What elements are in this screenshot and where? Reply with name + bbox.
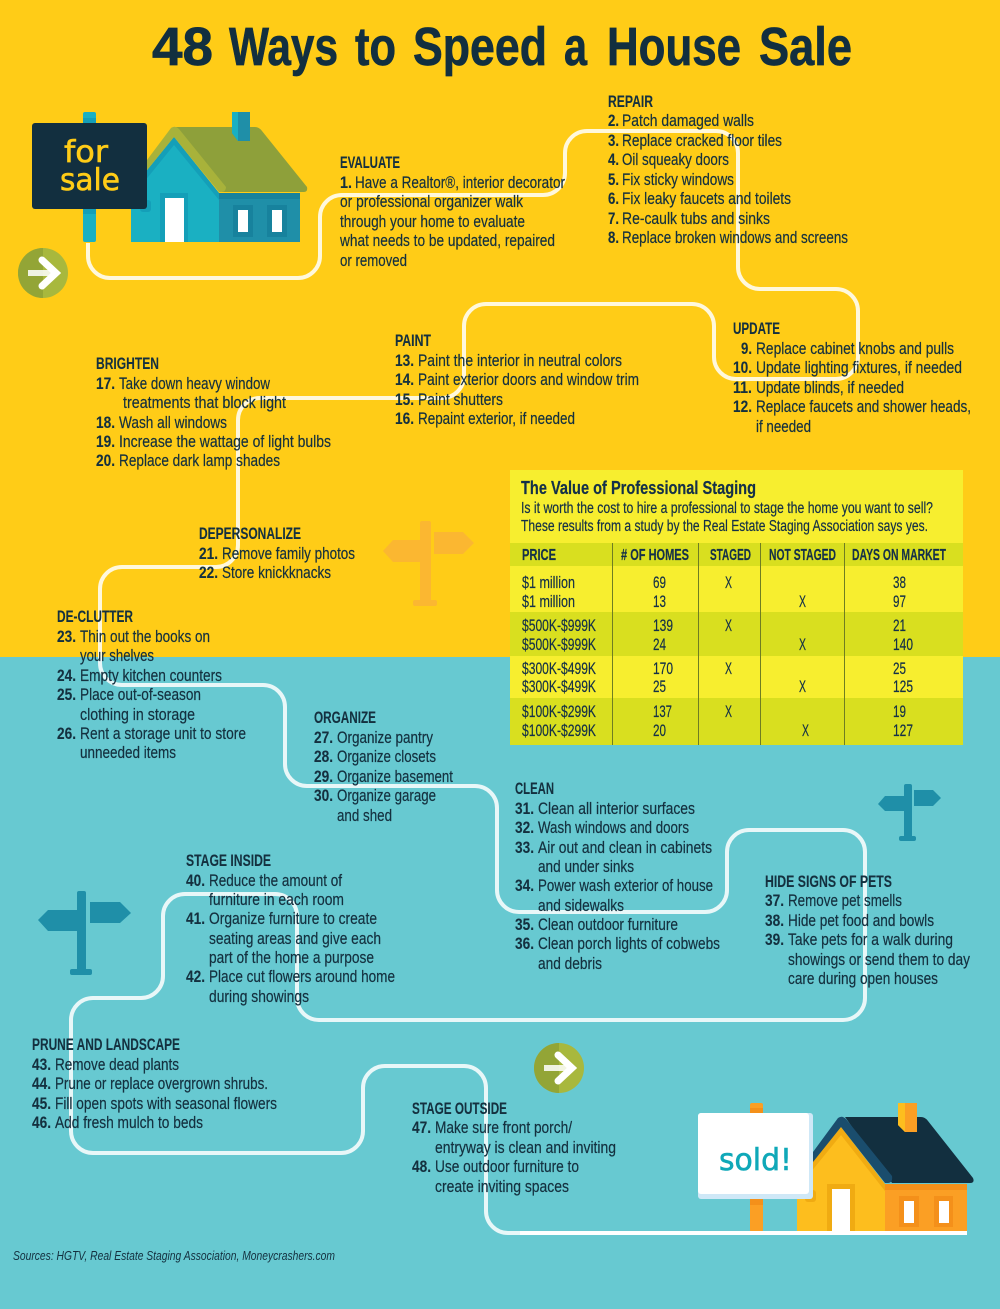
table header row: NOT STAGED (769, 547, 836, 564)
text block: brighten: Increase the wattage of light bulbs (119, 432, 331, 451)
text block: organize: and shed (337, 806, 392, 825)
sign text: for: for (64, 135, 109, 170)
sign text: sold: sold! (719, 1143, 792, 1178)
text block: depersonalize (199, 525, 355, 582)
text block: repair: 2. (608, 112, 619, 130)
heading: hide signs of pets: HIDE SIGNS OF PETS (765, 873, 892, 891)
heading: clean: CLEAN (515, 780, 554, 798)
text block: brighten: 20. (96, 452, 115, 470)
icon: small teal signpost (878, 784, 941, 841)
text block: stage inside: furniture in each room (209, 890, 344, 909)
text block: brighten: 19. (96, 433, 115, 451)
text block: organize: 29. (314, 768, 333, 786)
text block: prune and landscape (32, 1036, 277, 1132)
table data: $300K-$499K: X (799, 678, 806, 696)
text block: update: Replace cabinet knobs and pulls (756, 339, 954, 358)
heading: de-clutter: DE-CLUTTER (57, 608, 133, 626)
text block: repair: 8. (608, 229, 619, 247)
door of sold house in front of ground line (832, 1189, 850, 1235)
text block: clean: 31. (515, 800, 534, 818)
heading: brighten: BRIGHTEN (96, 355, 159, 373)
table data: $1 million: $1 million (522, 593, 575, 611)
text block: clean: Wash windows and doors (538, 818, 689, 837)
table data: $300K-$499K: $300K-$499K (522, 678, 596, 696)
text block: clean: 32. (515, 819, 534, 837)
table header row: STAGED (710, 547, 751, 564)
text block: stage inside: during showings (209, 987, 309, 1006)
text block: update: if needed (756, 417, 811, 436)
text block: hide signs of pets (765, 873, 970, 988)
sign text: sale: sale (60, 163, 120, 198)
table header row (522, 547, 946, 564)
table data: $300K-$499K: 25 (653, 678, 666, 696)
text block: update: Update blinds, if needed (756, 378, 904, 397)
text block: brighten: 17. (96, 375, 115, 393)
text block: repair: Fix sticky windows (622, 170, 734, 189)
table data: $500K-$999K: 24 (653, 636, 666, 654)
text block: evaluate: through your home to evaluate (340, 212, 525, 231)
table data: $1 million: $1 million (522, 574, 575, 592)
text block: stage outside: Make sure front porch/ (435, 1118, 572, 1137)
text block: stage outside: create inviting spaces (435, 1177, 569, 1196)
icon: start arrow (18, 248, 68, 298)
table data: $100K-$299K: $100K-$299K (522, 703, 596, 721)
icon: sold house and sign (698, 1103, 974, 1232)
table data: $500K-$999K: X (799, 636, 806, 654)
heading: evaluate: EVALUATE (340, 154, 400, 172)
panel: value of professional staging table (510, 470, 963, 745)
text block: de-clutter: 26. (57, 725, 76, 743)
title: a (564, 17, 588, 77)
text block: stage outside: Use outdoor furniture to (435, 1157, 579, 1176)
text block: de-clutter: Place out-of-season (80, 685, 201, 704)
text block: de-clutter: clothing in storage (80, 705, 195, 724)
text block: hide signs of pets: care during open houses (788, 969, 938, 988)
text block: clean: 35. (515, 916, 534, 934)
table heading: The Value of Professional Staging (521, 477, 756, 498)
table data: $1 million: X (799, 593, 806, 611)
table data: $1 million: X (725, 574, 732, 592)
text block: repair: 3. (608, 132, 619, 150)
text block: paint: 15. (395, 391, 414, 409)
heading: prune and landscape: PRUNE AND LANDSCAPE (32, 1036, 180, 1054)
text block: update: 11. (733, 379, 752, 397)
text block: prune and landscape: 43. (32, 1056, 51, 1074)
text block: stage outside: entryway is clean and inviting (435, 1138, 616, 1157)
text block: de-clutter: Rent a storage unit to store (80, 724, 246, 743)
heading: repair: REPAIR (608, 93, 653, 111)
text block: stage outside: 47. (412, 1119, 431, 1137)
table data: $100K-$299K: 137 (653, 703, 672, 721)
table data: $100K-$299K: 19 (893, 703, 906, 721)
heading: stage outside: STAGE OUTSIDE (412, 1100, 507, 1118)
text block: repair: 6. (608, 190, 619, 208)
table data: $1 million: 38 (893, 574, 906, 592)
table data: $300K-$499K: X (725, 660, 732, 678)
icon: orange signpost (383, 521, 474, 606)
heading: stage inside: STAGE INSIDE (186, 852, 271, 870)
text block: organize: 30. (314, 787, 333, 805)
background: yellow upper area (0, 0, 1000, 657)
text block: stage inside: Organize furniture to create (209, 909, 377, 928)
text block: organize: 28. (314, 748, 333, 766)
table data: $500K-$999K (522, 617, 913, 654)
text block: evaluate: or professional organizer walk (340, 192, 523, 211)
title: to (355, 17, 396, 77)
icon: for sale house and sign (32, 112, 307, 242)
table data: $500K-$999K: X (725, 617, 732, 635)
text block: update: 10. (733, 359, 752, 377)
text block: hide signs of pets: 39. (765, 931, 784, 949)
text block: clean: and debris (538, 954, 602, 973)
text block: evaluate: or removed (340, 251, 407, 270)
table data: $100K-$299K: X (802, 722, 809, 740)
text block: prune and landscape: Fill open spots with seasonal flowers (55, 1094, 277, 1113)
text block: hide signs of pets: Hide pet food and bowls (788, 911, 934, 930)
text block: depersonalize: 21. (199, 545, 218, 563)
text block: stage inside: Reduce the amount of (209, 871, 342, 890)
text block: evaluate: 1. (340, 174, 352, 192)
text block: repair: 7. (608, 210, 619, 228)
text block: clean: 34. (515, 877, 534, 895)
background: teal lower area (0, 657, 1000, 1309)
text block: depersonalize: Store knickknacks (222, 563, 331, 582)
text block: paint: 14. (395, 371, 414, 389)
text block: organize: Organize closets (337, 747, 436, 766)
text block: paint: Repaint exterior, if needed (418, 409, 575, 428)
table data: $300K-$499K: 170 (653, 660, 673, 678)
text block: evaluate: Have a Realtor®, interior decorator (355, 173, 565, 192)
text block: de-clutter: 25. (57, 686, 76, 704)
title: House (607, 17, 741, 77)
text block: brighten (96, 355, 331, 470)
table intro text (521, 500, 933, 535)
text block: de-clutter: Thin out the books on (80, 627, 210, 646)
sources note: Sources: HGTV, Real Estate Staging Association, Moneycrashers.com (13, 1248, 335, 1263)
text block: stage outside: 48. (412, 1158, 431, 1176)
table data: $300K-$499K (522, 660, 913, 696)
text block: repair: Patch damaged walls (622, 111, 754, 130)
text block: evaluate: what needs to be updated, repaired (339, 231, 555, 250)
title: 48 (152, 17, 213, 77)
text block: stage inside: part of the home a purpose (209, 948, 374, 967)
text block: hide signs of pets: Take pets for a walk during (788, 930, 953, 949)
text block: de-clutter: Empty kitchen counters (80, 666, 222, 685)
table data: $500K-$999K: $500K-$999K (522, 617, 596, 635)
text block: de-clutter: your shelves (80, 646, 154, 665)
text block: clean: Clean porch lights of cobwebs (538, 934, 720, 953)
text block: stage inside: seating areas and give each (209, 929, 381, 948)
table data: $500K-$999K: 21 (893, 617, 906, 635)
text block: prune and landscape: Add fresh mulch to beds (55, 1113, 203, 1132)
icon: arrow near finish (534, 1043, 584, 1093)
table data: $100K-$299K: $100K-$299K (522, 722, 596, 740)
title (152, 17, 852, 77)
text block: stage inside: 40. (186, 872, 205, 890)
table data: $100K-$299K (522, 703, 913, 740)
text block: depersonalize: Remove family photos (222, 544, 355, 563)
text block: stage outside (412, 1100, 616, 1196)
text block: organize: Organize pantry (337, 728, 433, 747)
text block: de-clutter (57, 608, 246, 762)
table data: $1 million: 97 (893, 593, 906, 611)
table data: $300K-$499K: 25 (893, 660, 906, 678)
text block: clean: Clean outdoor furniture (538, 915, 678, 934)
text block: repair: 4. (608, 151, 619, 169)
text block: organize: 27. (314, 729, 333, 747)
text block: repair: 5. (608, 171, 619, 189)
route line connecting all steps (71, 131, 967, 1233)
text block: organize (314, 709, 453, 825)
table data: $500K-$999K: 139 (653, 617, 673, 635)
text block: paint (395, 332, 639, 428)
text block: repair: Replace broken windows and screens (622, 228, 848, 247)
table data: $100K-$299K: X (725, 703, 732, 721)
table data: $1 million: 13 (653, 593, 666, 611)
heading: paint: PAINT (395, 332, 431, 350)
text block: clean: 36. (515, 935, 534, 953)
table data: $500K-$999K: $500K-$999K (522, 636, 596, 654)
title: Sale (759, 17, 852, 77)
table header row: DAYS ON MARKET (852, 547, 946, 564)
table data: $300K-$499K: 125 (893, 678, 913, 696)
text block: stage inside: 41. (186, 910, 205, 928)
ground line under sold house (520, 1231, 967, 1235)
text block: brighten: 18. (96, 414, 115, 432)
text block: stage inside (186, 852, 395, 1006)
text block: stage inside: Place cut flowers around home (209, 967, 395, 986)
text block: prune and landscape: 44. (32, 1075, 51, 1093)
text block: prune and landscape: 46. (32, 1114, 51, 1132)
text block: paint: Paint the interior in neutral colors (418, 351, 622, 370)
text block: clean: and under sinks (538, 857, 634, 876)
text block: paint: Paint shutters (418, 390, 503, 409)
text block: organize: Organize basement (337, 767, 453, 786)
table data: $100K-$299K: 127 (893, 722, 913, 740)
table data: $1 million (522, 574, 906, 611)
heading: depersonalize: DEPERSONALIZE (199, 525, 301, 543)
heading: update: UPDATE (733, 320, 780, 338)
text block: brighten: Replace dark lamp shades (119, 451, 280, 470)
text block: evaluate (339, 154, 565, 270)
text block: update: 12. (733, 398, 752, 416)
text block: hide signs of pets: 37. (765, 892, 784, 910)
text block: repair: Re-caulk tubs and sinks (622, 209, 770, 228)
text block: repair: Oil squeaky doors (622, 150, 729, 169)
text block: stage inside: 42. (186, 968, 205, 986)
text block: de-clutter: 23. (57, 628, 76, 646)
text block: de-clutter: unneeded items (80, 743, 176, 762)
text block: prune and landscape: Prune or replace overgrown shrubs. (55, 1074, 268, 1093)
text block: depersonalize: 22. (199, 564, 218, 582)
text block: clean: Clean all interior surfaces (538, 799, 695, 818)
table data: $1 million: 69 (653, 574, 666, 592)
text block: prune and landscape: 45. (32, 1095, 51, 1113)
text block: brighten: treatments that block light (123, 393, 286, 412)
text block: clean: Air out and clean in cabinets (538, 838, 712, 857)
text block: brighten: Wash all windows (119, 413, 227, 432)
text block: update: 9. (741, 340, 752, 358)
table header row: # OF HOMES (621, 547, 689, 564)
text block: prune and landscape: Remove dead plants (55, 1055, 179, 1074)
text block: repair (608, 93, 848, 247)
text block: hide signs of pets: Remove pet smells (788, 891, 902, 910)
text block: organize: Organize garage (337, 786, 436, 805)
icon: large teal signpost (38, 891, 131, 975)
table data: $300K-$499K: $300K-$499K (522, 660, 596, 678)
table data: $100K-$299K: 20 (653, 722, 666, 740)
text block: paint: 16. (395, 410, 414, 428)
text block: hide signs of pets: 38. (765, 912, 784, 930)
table header row: PRICE (522, 547, 556, 564)
text block: paint: 13. (395, 352, 414, 370)
text block: brighten: Take down heavy window (119, 374, 271, 393)
text block: clean: Power wash exterior of house (538, 876, 713, 895)
title: Ways (229, 17, 338, 77)
text block: de-clutter: 24. (57, 667, 76, 685)
text block: repair: Fix leaky faucets and toilets (622, 189, 791, 208)
heading: organize: ORGANIZE (314, 709, 376, 727)
text block: paint: Paint exterior doors and window trim (418, 370, 639, 389)
text block: clean (515, 780, 720, 973)
text block: clean: and sidewalks (538, 896, 624, 915)
title: Speed (413, 17, 547, 77)
text block: update (733, 320, 971, 436)
text block: repair: Replace cracked floor tiles (622, 131, 782, 150)
text block: clean: 33. (515, 839, 534, 857)
table data: $500K-$999K: 140 (893, 636, 913, 654)
